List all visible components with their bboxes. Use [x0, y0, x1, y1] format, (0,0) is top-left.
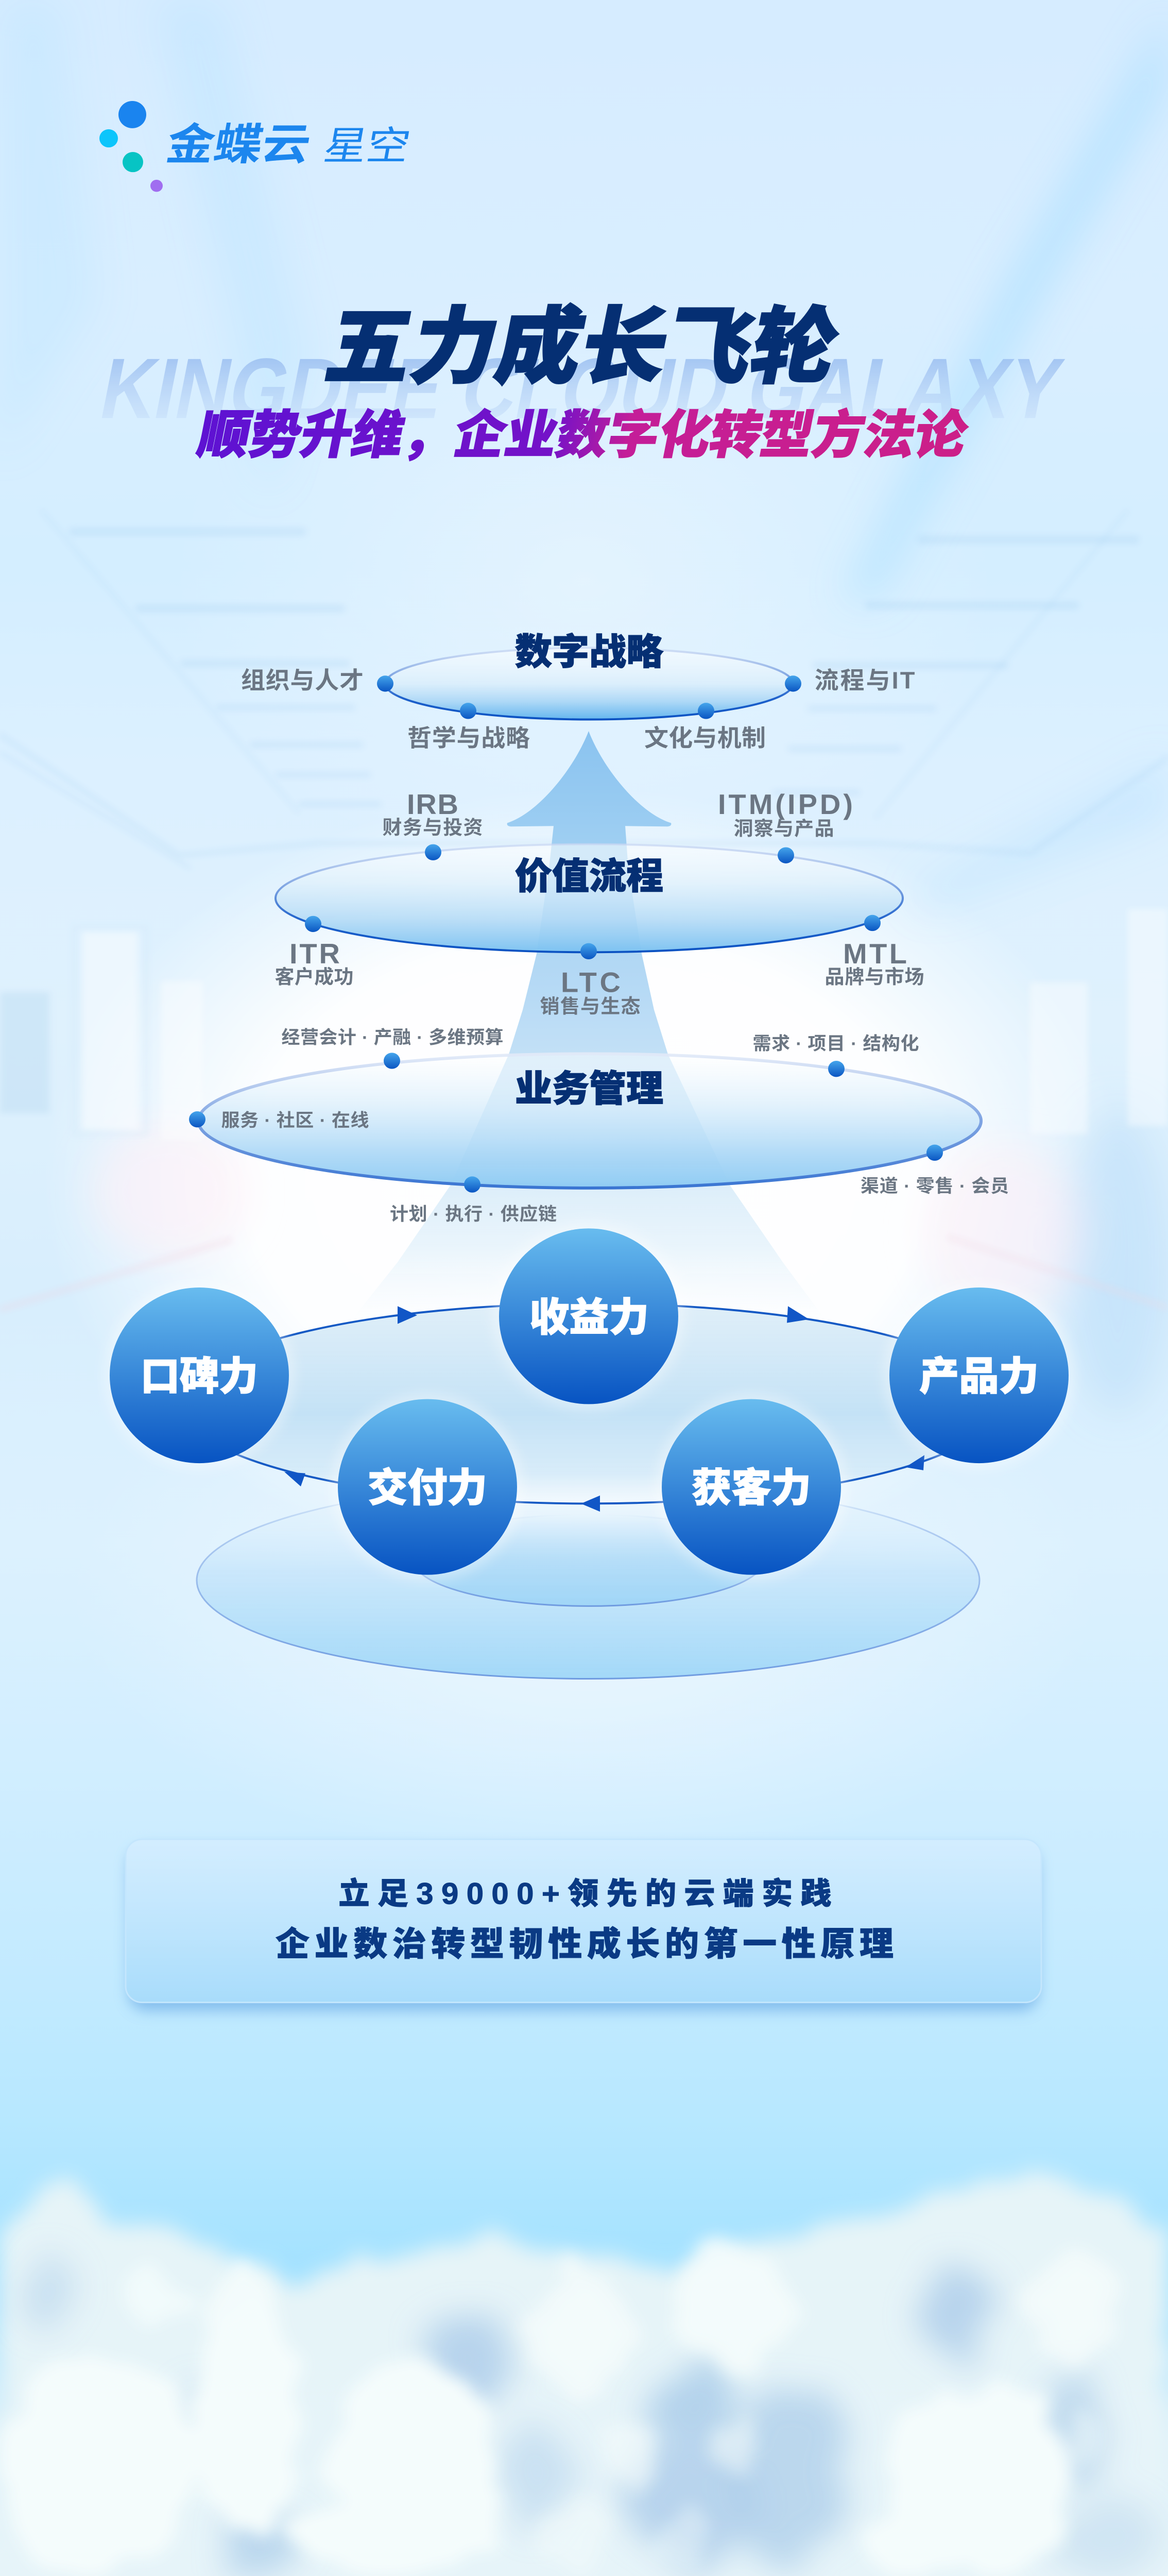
circle: 交付力	[333, 1394, 522, 1580]
abbreviations: ITM(IPD)	[718, 788, 853, 820]
circle: 收益力	[494, 1224, 683, 1409]
panel: 价值流程 tier	[274, 788, 924, 1017]
labels: 服务 · 社区 · 在线	[221, 1110, 369, 1130]
ring: flywheel path	[180, 1303, 998, 1503]
abbreviations: IRB	[407, 788, 458, 820]
abbreviations: LTC	[561, 967, 621, 998]
panel: five forces flywheel	[105, 1224, 1074, 1580]
ellipse: outer disc	[197, 1482, 980, 1679]
logo wordmark	[163, 121, 414, 169]
arrow: upward growth arrow and cone	[353, 731, 824, 1318]
logo	[99, 101, 414, 192]
sublabels: 品牌与市场	[825, 966, 924, 988]
circle: 口碑力: 口碑力	[141, 1355, 258, 1399]
clouds	[0, 2163, 1168, 2576]
logo wordmark: 金蝶云	[163, 121, 315, 169]
circle: 收益力: 收益力	[529, 1296, 649, 1340]
labels: 经营会计 · 产融 · 多维预算	[281, 1027, 503, 1048]
logo wordmark: 星空	[320, 125, 414, 168]
heading: 数字战略: 数字战略	[515, 632, 664, 673]
sublabels: 洞察与产品	[733, 818, 834, 839]
sublabels	[274, 817, 924, 1017]
abbreviations	[289, 788, 907, 998]
abbreviations: ITR	[289, 938, 340, 970]
labels	[221, 1027, 1009, 1225]
circle: 获客力	[657, 1394, 846, 1580]
labels: 流程与IT	[815, 667, 915, 694]
subtitle: 顺势升维，企业数字化转型方法论	[194, 406, 973, 464]
panel: 业务管理 tier	[189, 1027, 1009, 1225]
ellipse: inner disc	[414, 1514, 764, 1606]
sublabels: 财务与投资	[382, 817, 483, 838]
circle: 产品力: 产品力	[919, 1355, 1039, 1399]
panel: 数字战略 tier	[241, 632, 915, 751]
sublabels: 客户成功	[274, 966, 353, 988]
abbreviations: MTL	[843, 938, 907, 970]
callout	[126, 1839, 1041, 2010]
labels	[241, 667, 915, 751]
circle: 产品力	[884, 1282, 1074, 1468]
ellipse: tier one	[385, 648, 793, 720]
ellipse: tier two	[276, 844, 903, 952]
labels: 组织与人才	[241, 667, 364, 694]
callout text: 企业数治转型韧性成长的第一性原理	[276, 1925, 894, 1962]
labels: 需求 · 项目 · 结构化	[753, 1033, 919, 1054]
sublabels: 销售与生态	[540, 995, 641, 1017]
nodes	[189, 1053, 943, 1193]
heading: 价值流程: 价值流程	[515, 856, 663, 897]
callout text: 立足39000+领先的云端实践	[338, 1876, 831, 1910]
arrows on ring	[284, 1306, 924, 1512]
panel: base discs	[197, 1482, 980, 1679]
labels: 渠道 · 零售 · 会员	[861, 1176, 1009, 1196]
labels: 哲学与战略	[407, 725, 530, 751]
callout text	[276, 1876, 894, 1962]
icon: logo dots	[99, 101, 163, 192]
circle: 交付力: 交付力	[368, 1466, 487, 1510]
ellipse: tier three	[198, 1054, 981, 1188]
circle: 口碑力	[105, 1282, 294, 1468]
circle: 获客力: 获客力	[692, 1466, 811, 1510]
nodes	[305, 844, 881, 959]
nodes	[377, 675, 801, 719]
heading: 业务管理: 业务管理	[515, 1069, 663, 1109]
title: 五力成长飞轮	[318, 301, 847, 394]
labels: 文化与机制	[644, 725, 766, 751]
labels: 计划 · 执行 · 供应链	[390, 1204, 557, 1225]
